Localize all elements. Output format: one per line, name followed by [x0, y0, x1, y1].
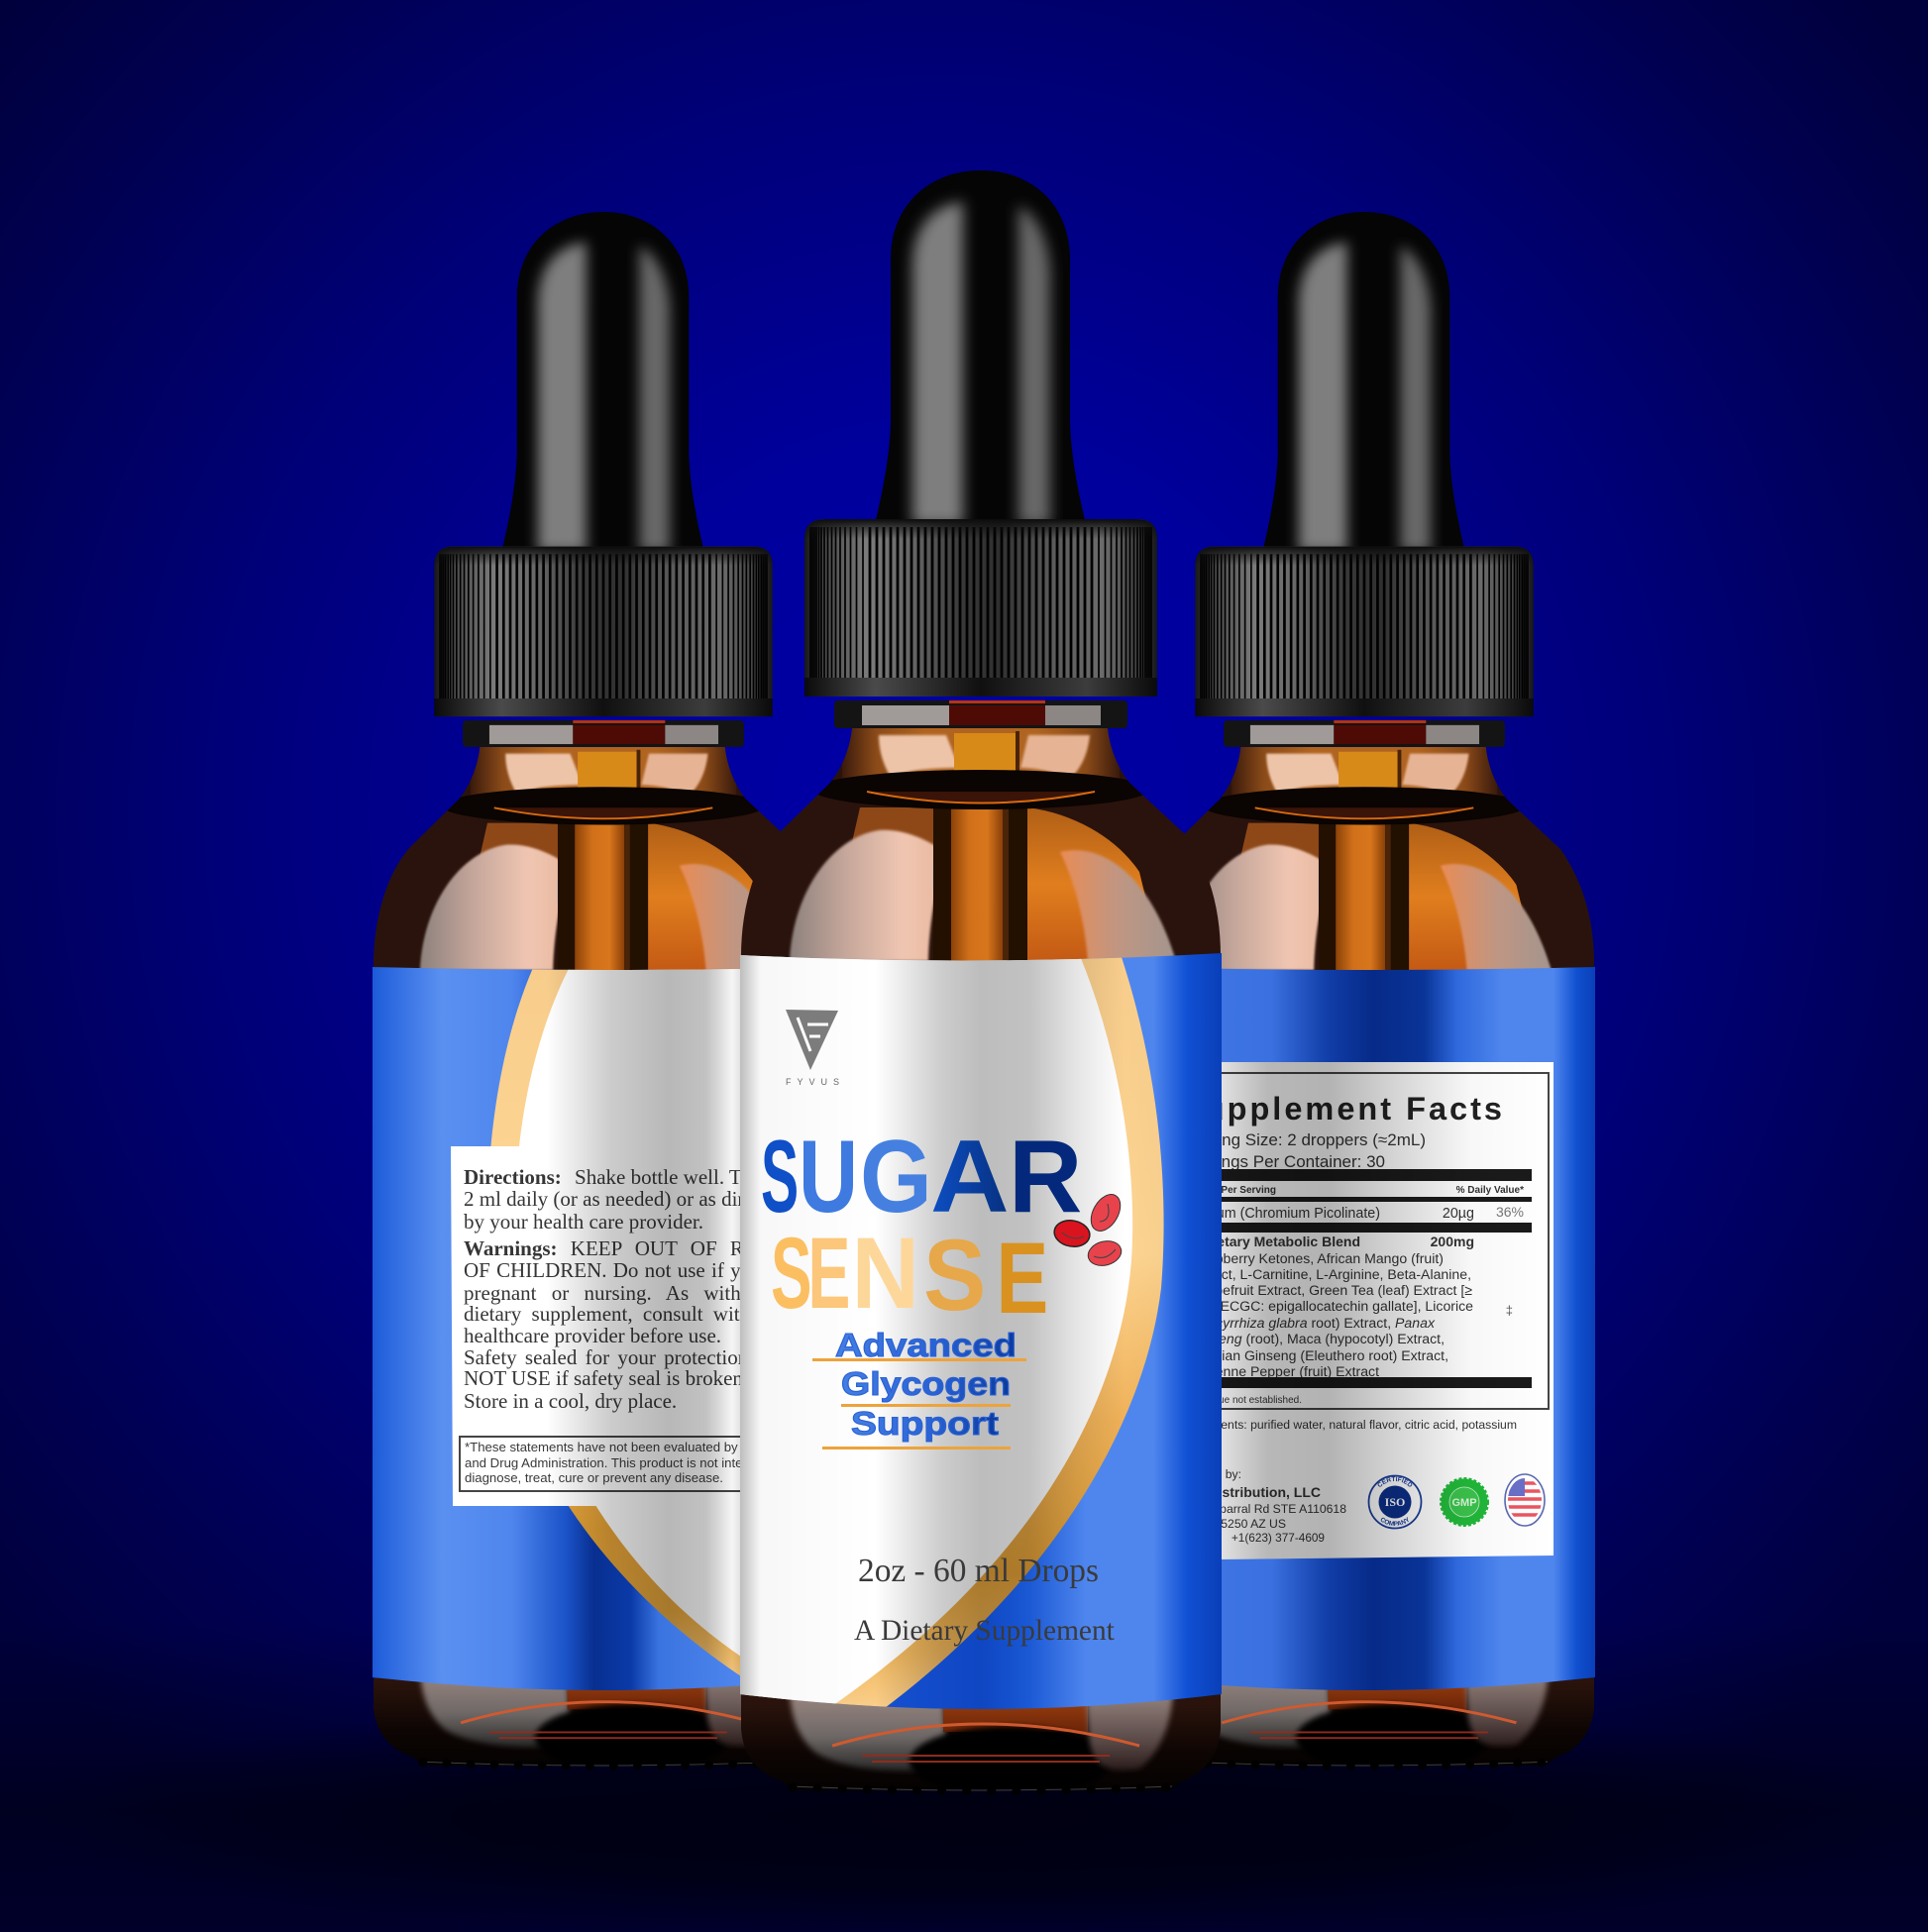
FDA disclaimer box [459, 1436, 740, 1492]
right bottle: supplement facts side [1087, 212, 1595, 1789]
title: SUGAR: G [860, 1118, 932, 1234]
icon: GMP badge [1441, 1478, 1488, 1526]
icon: USA flag badge [1505, 1474, 1546, 1526]
FDA disclaimer box: *These statements have not been evaluated by the Food [465, 1440, 793, 1454]
right bottle body [1126, 212, 1602, 1772]
directions and warnings text [464, 1169, 740, 1413]
title: SENSE: E [808, 1218, 850, 1331]
center bottle: front side [733, 170, 1229, 1797]
facts table: 20µg [1443, 1206, 1474, 1222]
title: SENSE: N [852, 1217, 919, 1330]
icon: GMP badge: GMP [1451, 1497, 1477, 1509]
directions and warnings text: pregnant or nursing. As with any [464, 1281, 787, 1305]
icon: ISO badge: COMPANY [1381, 1517, 1409, 1526]
supplement facts panel [1222, 1062, 1553, 1559]
right bottle label [1222, 967, 1595, 1690]
title: SENSE: S [923, 1219, 986, 1332]
left bottle body [366, 212, 841, 1772]
distributor address [1222, 1469, 1345, 1544]
directions and warnings text: OF CHILDREN. Do not use if you are [464, 1258, 793, 1282]
icon: ISO badge: ISO [1385, 1495, 1405, 1509]
tagline: Advanced Glycogen Support: Advanced [835, 1327, 1017, 1363]
logo: FYVUS: FYVUS [786, 1077, 845, 1087]
serving information: Serving Size: 2 droppers (≈2mL) [1183, 1130, 1426, 1149]
facts table: 50% ECGC: epigallocatechin gallate], Licorice [1188, 1298, 1473, 1314]
logo: FYVUS [786, 1010, 839, 1085]
directions panel [451, 1146, 740, 1506]
size and dietary supplement text: A Dietary Supplement [854, 1615, 1115, 1647]
facts table: Grapefruit Extract, Green Tea (leaf) Extract [≥ [1192, 1282, 1472, 1298]
icon: ISO badge: CERTIFIED [1377, 1476, 1413, 1487]
supplement facts title: Supplement Facts [1180, 1091, 1505, 1127]
serving information [1223, 1133, 1425, 1169]
facts table: Extract, L-Carnitine, L-Arginine, Beta-Alanine, [1189, 1266, 1471, 1282]
title: SUGAR: A [930, 1119, 1010, 1234]
facts table: % Daily Value* [1456, 1185, 1524, 1196]
facts table: Proprietary Metabolic Blend [1176, 1234, 1360, 1249]
FDA disclaimer box: and Drug Administration. This product is not intended to [465, 1455, 787, 1470]
distributor address: Distributed by: [1164, 1467, 1241, 1481]
size and dietary supplement text: 2oz - 60 ml Drops [858, 1553, 1099, 1589]
tagline: Advanced Glycogen Support: Glycogen [841, 1365, 1011, 1402]
facts table: Ginseng (root), Maca (hypocotyl) Extract, [1190, 1331, 1445, 1346]
icon: red blood cells [1053, 1194, 1122, 1266]
directions and warnings text: Directions: Shake bottle well. Take [464, 1165, 769, 1189]
size and dietary supplement text [854, 1553, 1115, 1647]
facts table: Chromium (Chromium Picolinate) [1171, 1206, 1380, 1222]
facts table: Raspberry Ketones, African Mango (fruit) [1191, 1250, 1444, 1266]
center bottle label [733, 946, 1222, 1729]
other ingredients: Other Ingredients: purified water, natural flavor, citric acid, potassium [1150, 1418, 1517, 1432]
facts table: (Glycyrrhiza glabra root) Extract, Panax [1190, 1315, 1436, 1331]
distributor address: Scottsdale 85250 AZ US [1154, 1517, 1286, 1531]
facts table: ‡Daily Value not established. [1175, 1395, 1302, 1406]
directions and warnings text: 2 ml daily (or as needed) or as directed [464, 1187, 789, 1211]
FDA disclaimer box: diagnose, treat, cure or prevent any disease. [465, 1470, 723, 1485]
distributor address: FYVUS Distribution, LLC [1158, 1484, 1321, 1500]
title: SENSE: E [997, 1222, 1048, 1335]
facts table: Siberian Ginseng (Eleuthero root) Extract, [1189, 1347, 1448, 1363]
facts table: ‡ [1506, 1303, 1513, 1318]
title: SUGAR: U [799, 1119, 858, 1234]
center bottle body [733, 170, 1229, 1797]
title: SUGAR [763, 1139, 1080, 1213]
facts table: Cayenne Pepper (fruit) Extract [1191, 1363, 1379, 1379]
left bottle label [373, 967, 740, 1690]
directions and warnings text: healthcare provider before use. [464, 1324, 721, 1347]
facts table: 200mg [1431, 1234, 1474, 1249]
tagline: Advanced Glycogen Support: Support [851, 1405, 999, 1442]
directions and warnings text: Store in a cool, dry place. [464, 1389, 677, 1413]
tagline: Advanced Glycogen Support [812, 1327, 1026, 1449]
distributor address: E Chaparral Rd STE A110618 [1186, 1502, 1346, 1516]
directions and warnings text: by your health care provider. [464, 1210, 703, 1234]
left bottle: directions side [366, 212, 856, 1772]
distributor address: +1(623) 377-4609 [1232, 1531, 1325, 1545]
title: SENSE: S [771, 1217, 811, 1330]
directions and warnings text: dietary supplement, consult with your [464, 1302, 799, 1326]
title: SENSE [773, 1236, 1046, 1313]
facts table: Amount Per Serving [1181, 1185, 1276, 1196]
title: SUGAR: S [761, 1119, 799, 1234]
directions and warnings text: Safety sealed for your protection. DO [464, 1345, 792, 1369]
directions and warnings text: NOT USE if safety seal is broken. [464, 1366, 748, 1390]
icon: ISO badge [1367, 1474, 1423, 1530]
serving information: Servings Per Container: 30 [1183, 1152, 1385, 1171]
facts table: 36% [1496, 1204, 1524, 1220]
facts table [1222, 1169, 1532, 1403]
directions and warnings text: Warnings: KEEP OUT OF REACH [464, 1236, 801, 1260]
title: SUGAR: R [1009, 1119, 1082, 1234]
